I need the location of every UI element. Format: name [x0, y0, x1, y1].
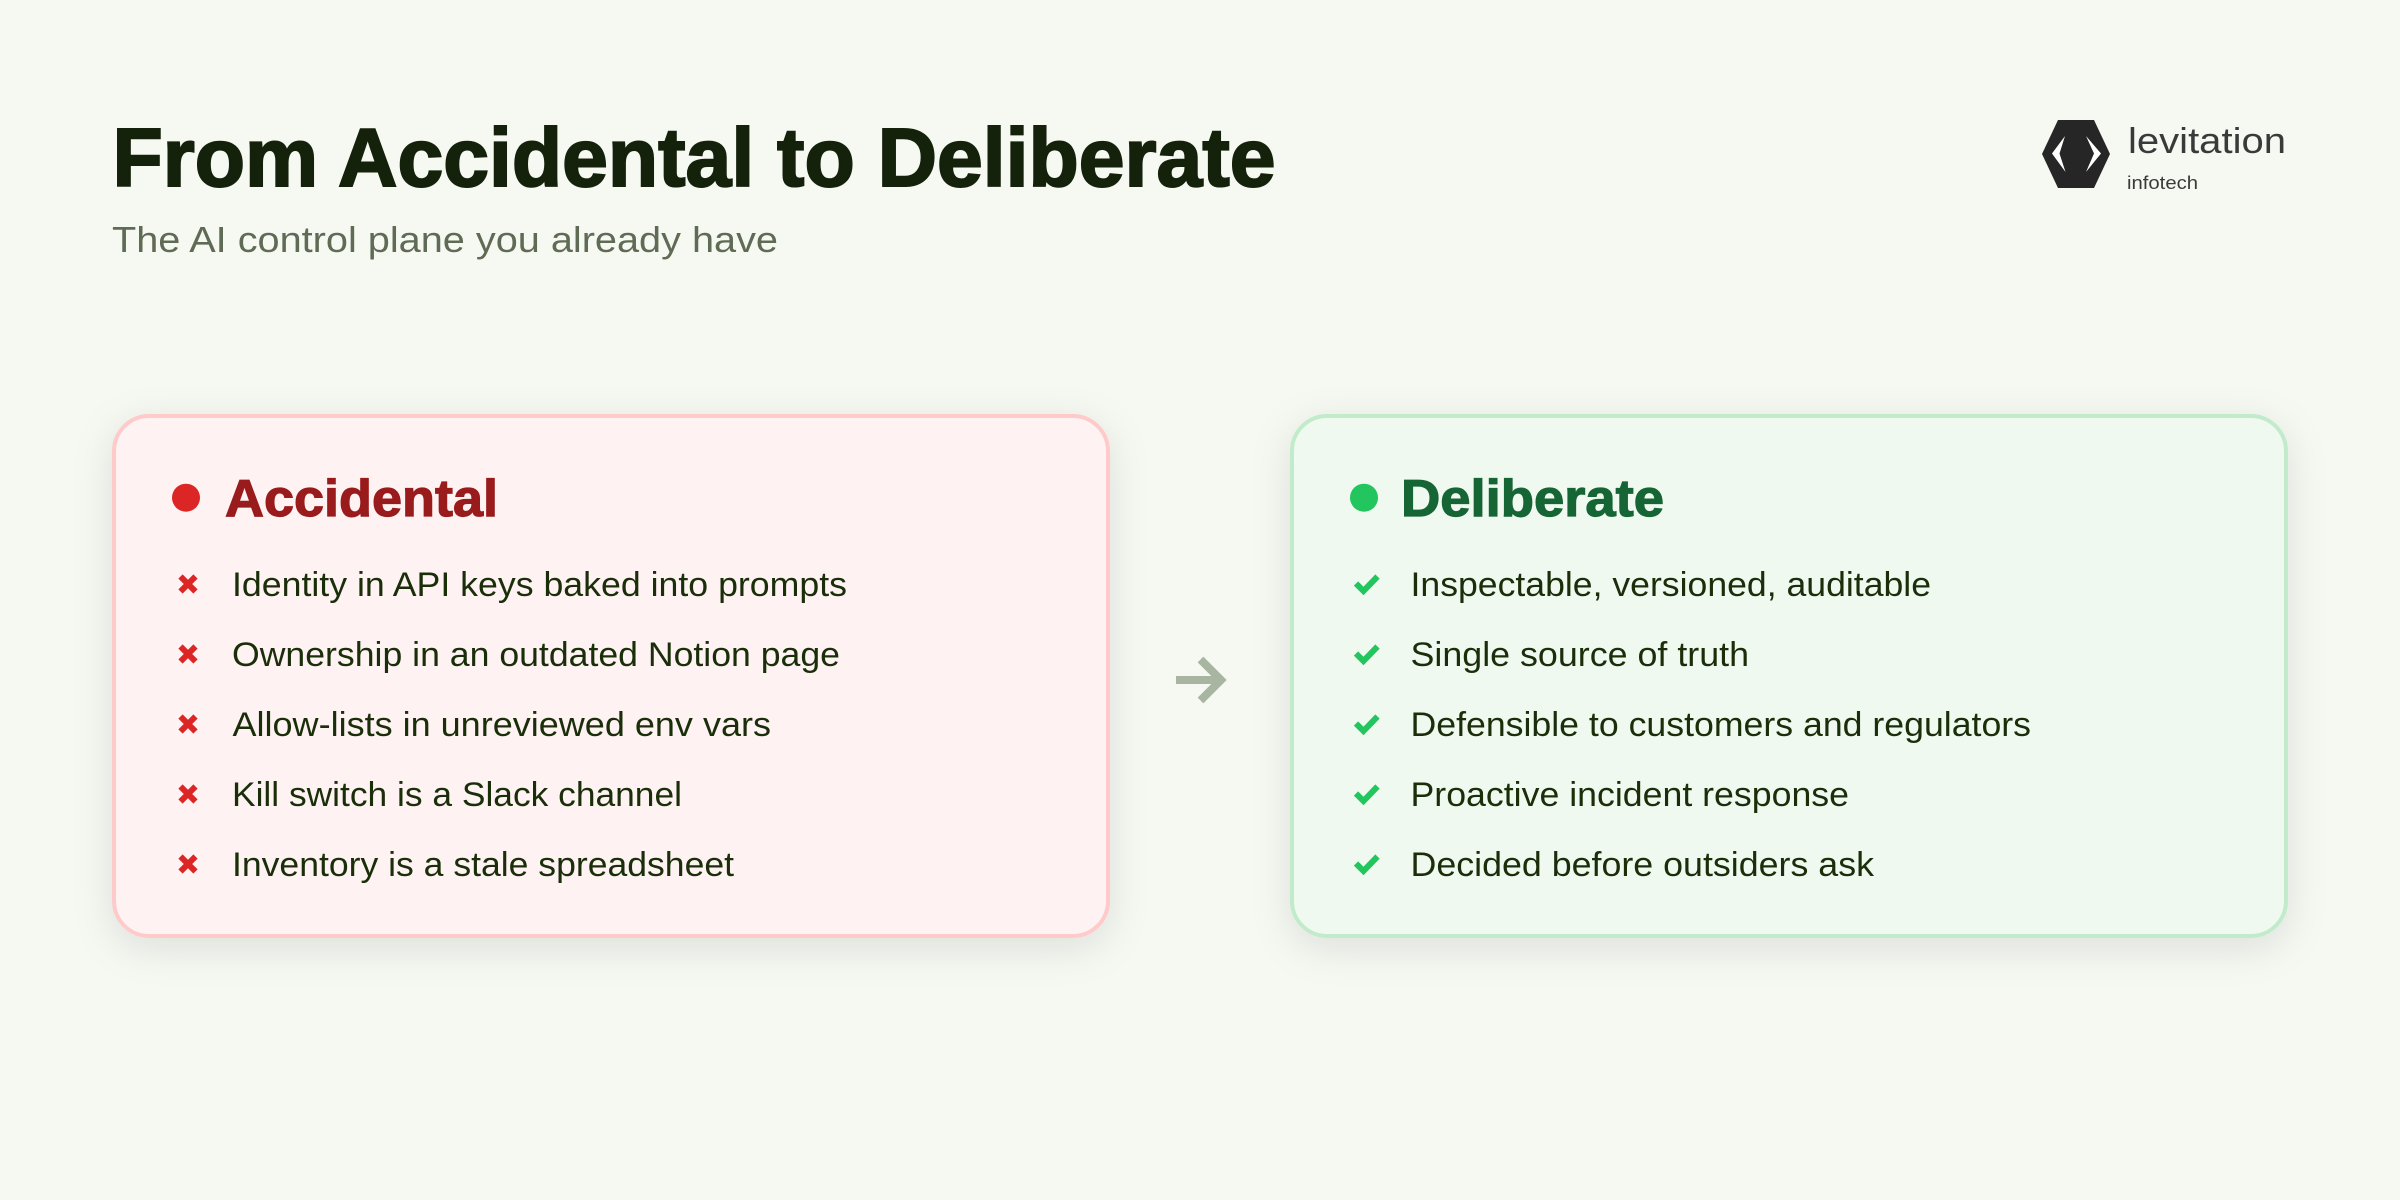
logo: levitation infotech — [2042, 120, 2286, 193]
title: From Accidental to Deliberate — [112, 111, 1276, 204]
heading: Accidental — [225, 470, 498, 528]
item 1: Inspectable, versioned, auditable — [1410, 566, 1931, 604]
logo wordmark: levitation — [2128, 120, 2286, 161]
panel: accidental — [114, 416, 1108, 936]
status dot — [1350, 484, 1378, 512]
arrow — [1176, 660, 1222, 700]
subtitle: The AI control plane you already have — [112, 219, 778, 260]
item 4: Proactive incident response — [1410, 776, 1849, 814]
item 5: Decided before outsiders ask — [1410, 846, 1875, 884]
item 1: Identity in API keys baked into prompts — [232, 566, 847, 604]
item 3: Defensible to customers and regulators — [1410, 706, 2031, 744]
card background — [1292, 416, 2286, 936]
logo subtext: infotech — [2127, 173, 2198, 193]
status dot — [172, 484, 200, 512]
item 2: Single source of truth — [1410, 636, 1749, 674]
card background — [114, 416, 1108, 936]
item 4: Kill switch is a Slack channel — [232, 776, 682, 814]
item 3: Allow-lists in unreviewed env vars — [232, 706, 771, 744]
heading: Deliberate — [1401, 470, 1664, 528]
panel: deliberate — [1292, 416, 2286, 936]
item 5: Inventory is a stale spreadsheet — [232, 846, 735, 884]
icon: hexagon with chevrons — [2042, 120, 2110, 188]
item 2: Ownership in an outdated Notion page — [232, 636, 840, 674]
